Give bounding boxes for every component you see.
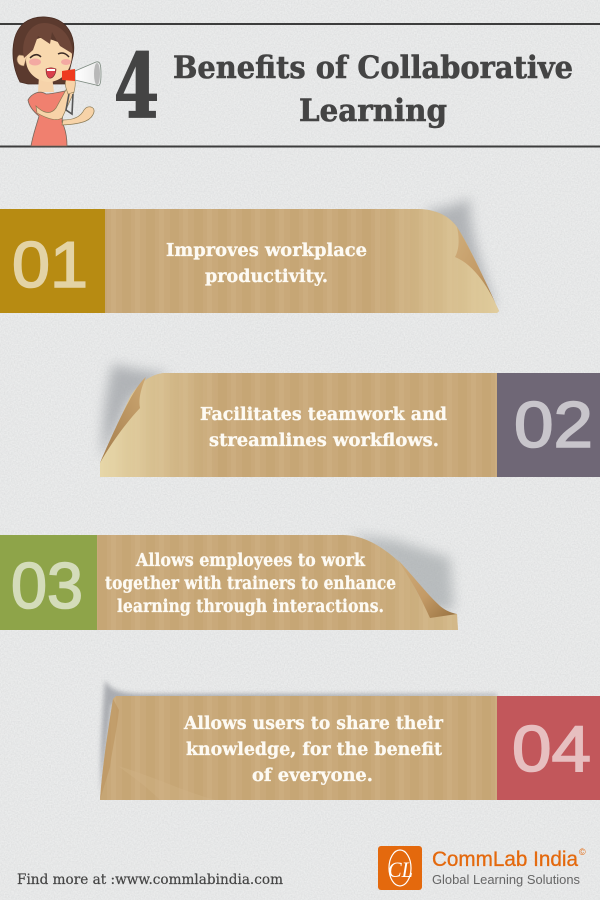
icon: CL monogram <box>378 846 422 890</box>
page curl <box>455 227 499 311</box>
number box <box>497 373 600 477</box>
icon: woman with megaphone <box>13 17 101 146</box>
trademark: © <box>579 847 586 857</box>
number 4: 4 <box>114 34 159 138</box>
text: together with trainers to enhance <box>105 574 396 594</box>
text: Allows users to share their <box>183 714 444 734</box>
tagline: Global Learning Solutions <box>432 872 580 887</box>
shadow <box>350 534 454 612</box>
brand name: CommLab India <box>432 848 578 871</box>
text: knowledge, for the benefit <box>186 740 442 760</box>
text: of everyone. <box>252 766 373 786</box>
number box <box>0 535 97 630</box>
page curl <box>100 699 119 800</box>
shadow <box>425 198 497 310</box>
text: productivity. <box>205 267 328 287</box>
number: 02 <box>514 388 593 461</box>
text: learning through interactions. <box>117 597 384 617</box>
title <box>173 50 573 129</box>
number: 01 <box>12 228 88 301</box>
banner strip <box>100 696 497 800</box>
text: Improves workplace <box>166 241 367 261</box>
text <box>166 241 367 287</box>
title: Benefits of Collaborative <box>173 50 573 86</box>
panel: benefit 04 <box>100 680 600 800</box>
footer link text: Find more at :www.commlabindia.com <box>17 872 283 888</box>
banner strip <box>100 373 497 477</box>
header <box>0 17 600 147</box>
banner strip <box>97 535 458 630</box>
page curl <box>397 559 457 618</box>
shadow <box>101 680 497 795</box>
panel: benefit 03 <box>0 534 458 630</box>
logo: CommLab India <box>378 846 586 890</box>
panel: benefit 02 <box>100 364 600 477</box>
text: Facilitates teamwork and <box>200 405 447 425</box>
text <box>200 405 447 451</box>
shadow <box>102 364 170 460</box>
number: 04 <box>512 712 591 785</box>
text: streamlines workflows. <box>209 431 439 451</box>
text <box>105 551 396 617</box>
icon: CL monogram: CL <box>388 857 413 882</box>
number box <box>0 209 105 313</box>
banner strip <box>105 209 499 313</box>
title: Learning <box>299 93 447 129</box>
page curl <box>100 377 146 463</box>
text: Allows employees to work <box>135 551 366 571</box>
number: 03 <box>11 549 83 622</box>
number box <box>497 696 600 800</box>
text <box>183 714 444 786</box>
panel: benefit 01 <box>0 198 499 313</box>
